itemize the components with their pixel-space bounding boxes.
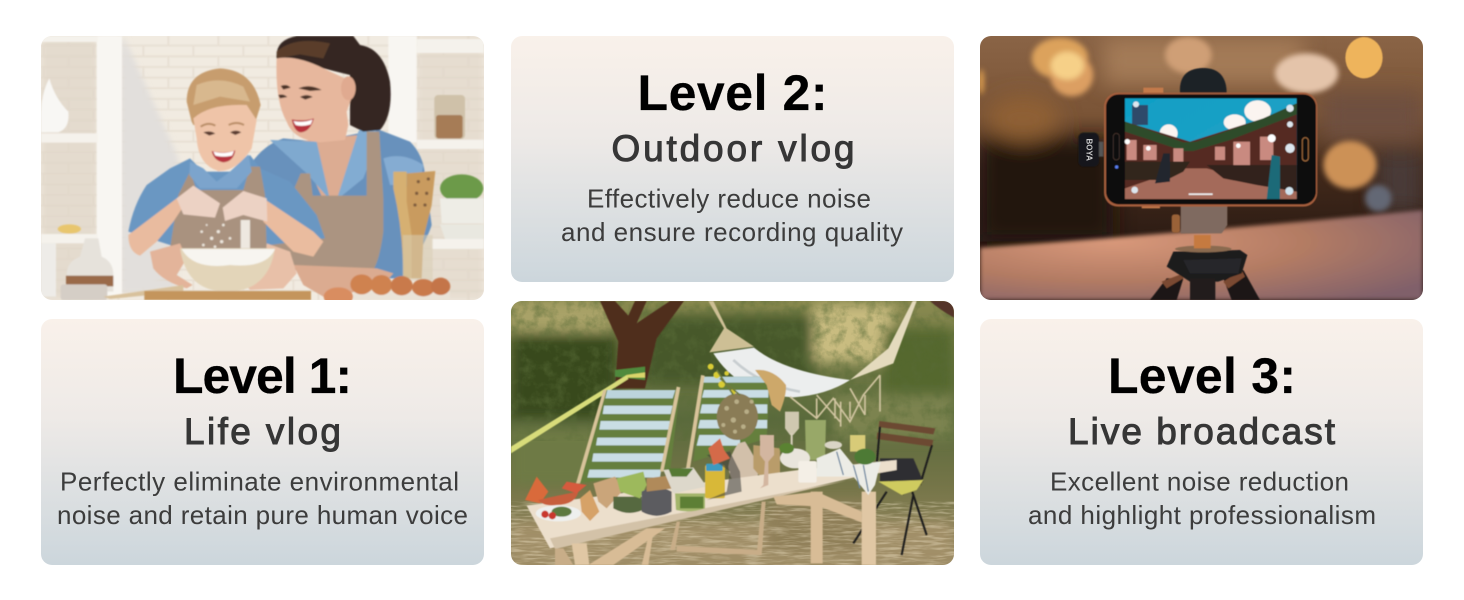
text block: description xyxy=(561,184,903,247)
glasses, jars, table items behind xyxy=(785,412,799,435)
microphone xyxy=(1097,142,1103,157)
text block: description: and highlight professionalism xyxy=(1028,500,1376,530)
spoons, glass, board, eggs xyxy=(393,172,413,278)
panel: Level 3 xyxy=(980,319,1423,565)
text block: description: and ensure recording quality xyxy=(561,217,903,247)
table xyxy=(527,460,897,548)
text block: description: Effectively reduce noise xyxy=(587,184,871,214)
food xyxy=(525,477,548,503)
text block: description: noise and retain pure human voice xyxy=(57,500,468,530)
hat xyxy=(755,370,786,412)
heading: Level 1: Level 1: xyxy=(173,348,352,404)
folding chair right xyxy=(879,421,935,434)
restaurant on screen xyxy=(1125,103,1297,199)
girl xyxy=(128,155,325,245)
flour falling xyxy=(241,220,250,248)
photo: phone on tripod xyxy=(980,36,1423,300)
text block: description xyxy=(57,466,468,530)
photo: picnic table with hammock and deck chairs xyxy=(511,301,954,565)
microphone brand: BOYA xyxy=(1085,138,1094,161)
heading: Level 2: Level 2: xyxy=(638,65,828,121)
subheading: Live broadcast: Live broadcast xyxy=(1068,411,1336,452)
subheading: Outdoor vlog: Outdoor vlog xyxy=(612,128,854,169)
tree xyxy=(600,301,684,388)
chair left xyxy=(577,390,680,483)
text block: description xyxy=(1028,466,1376,530)
heading: Level 3: Level 3: xyxy=(1108,348,1296,404)
woman xyxy=(250,125,432,278)
text block: description: Excellent noise reduction xyxy=(1050,466,1349,496)
text block: description: Perfectly eliminate environmental xyxy=(60,466,459,496)
photo: mother and daughter baking xyxy=(41,36,484,300)
strap xyxy=(511,375,628,453)
phone xyxy=(1143,88,1163,93)
panel: Level 2 xyxy=(511,36,954,282)
subheading: Life vlog: Life vlog xyxy=(184,411,341,452)
chair right xyxy=(693,377,770,462)
towel xyxy=(817,448,881,495)
hammock xyxy=(708,301,754,352)
flowers and vase xyxy=(717,393,758,440)
table xyxy=(980,210,1423,300)
tripod xyxy=(1150,278,1183,300)
panel: Level 1 xyxy=(41,319,484,565)
